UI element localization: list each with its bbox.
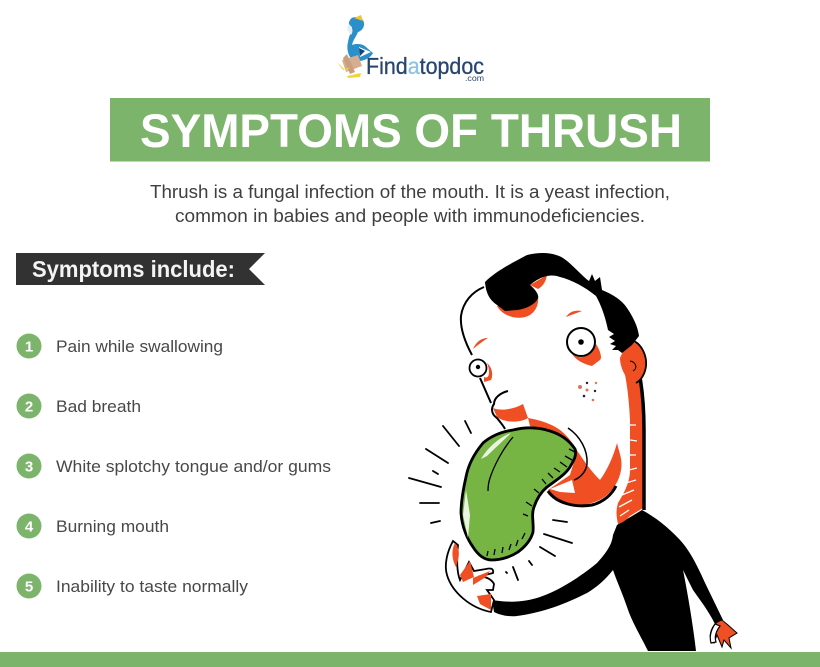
- left brow: [473, 338, 488, 349]
- face outline: [461, 287, 491, 403]
- hair orange shadow: [497, 275, 547, 318]
- tongue edge ticks: [487, 449, 575, 556]
- item 1: [16, 334, 223, 358]
- hair: [485, 253, 639, 353]
- logo wordmark: Findatopdoc: [366, 53, 484, 79]
- right brow: [566, 311, 582, 317]
- item 2: Bad breath: [56, 397, 141, 416]
- inner mouth line: [568, 428, 587, 480]
- icon: duck mascot: [337, 15, 373, 78]
- shirt and arms: [492, 510, 723, 651]
- item 2: 2: [25, 398, 33, 416]
- illustration: man with green tongue: [409, 253, 737, 651]
- item 5: [16, 574, 249, 598]
- tongue crease: [488, 437, 513, 491]
- footer bar: [0, 652, 820, 667]
- intro text: [150, 182, 670, 226]
- symptom list: [16, 334, 331, 598]
- nose and mouth line: [492, 391, 508, 429]
- symptoms heading ribbon: [16, 253, 265, 285]
- item 1: Pain while swallowing: [56, 337, 223, 356]
- intro text: common in babies and people with immunodeficiencies.: [175, 206, 645, 226]
- lower lip line: [548, 486, 616, 506]
- neck ticks: [619, 425, 637, 516]
- mouth highlight: [550, 480, 575, 493]
- item 5: Inability to taste normally: [56, 577, 249, 596]
- right eye: [567, 328, 595, 356]
- upper lip band: [528, 418, 585, 465]
- mustache: [493, 404, 528, 422]
- item 4: 4: [25, 518, 34, 536]
- right hand: [710, 620, 737, 648]
- tongue highlights: [463, 433, 511, 538]
- eye shadows: [484, 344, 601, 382]
- ear outline: [634, 341, 646, 383]
- ear: [620, 342, 646, 383]
- item 3: [16, 454, 331, 478]
- item 3: White splotchy tongue and/or gums: [56, 457, 331, 476]
- title banner: [110, 98, 710, 162]
- left eye: [470, 360, 486, 376]
- item 4: [16, 514, 169, 538]
- item 3: 3: [25, 458, 33, 476]
- item 2: [16, 394, 141, 418]
- tongue: [461, 428, 576, 560]
- neck shading: [616, 362, 643, 524]
- logo: [337, 15, 484, 83]
- item 4: Burning mouth: [56, 517, 169, 536]
- heading: Symptoms include:: [32, 256, 235, 282]
- logo domain: .com: [465, 74, 484, 83]
- item 1: 1: [25, 338, 33, 356]
- title: SYMPTOMS OF THRUSH: [140, 104, 682, 157]
- freckles: [578, 382, 597, 401]
- left hand: [446, 541, 494, 612]
- mouth interior: [548, 443, 622, 505]
- neck outline: [639, 372, 644, 510]
- item 5: 5: [25, 578, 33, 596]
- inner ear: [630, 361, 636, 371]
- intro text: Thrush is a fungal infection of the mouth. It is a yeast infection,: [150, 182, 670, 202]
- surprise lines: [409, 421, 572, 580]
